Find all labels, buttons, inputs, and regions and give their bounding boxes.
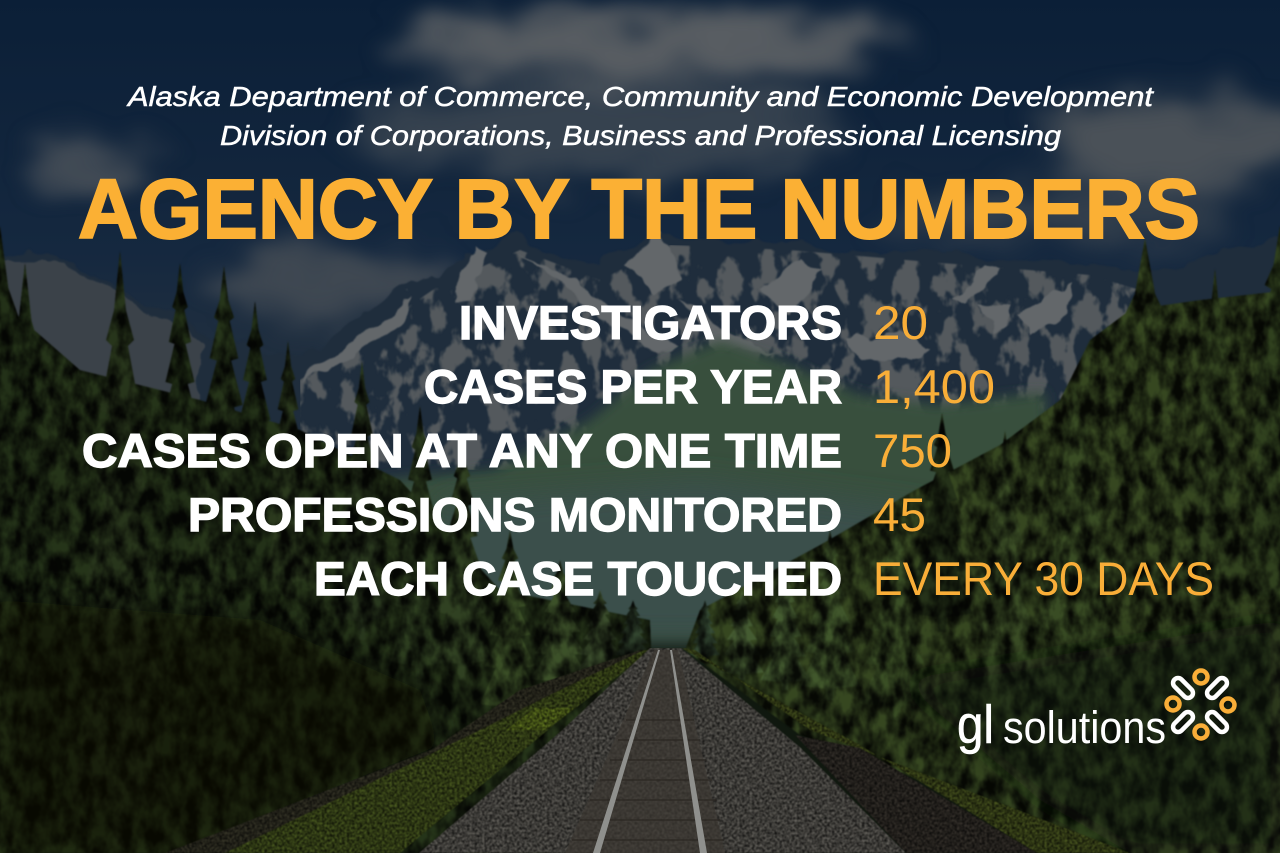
stat values: 750 [873, 424, 952, 477]
background: green valley slope [380, 340, 1060, 640]
background: trackside verges [165, 648, 1130, 853]
stat labels: CASES PER YEAR [424, 360, 842, 413]
stat values: 1,400 [873, 360, 995, 413]
subtitle line 1: Alaska Department of Commerce, Community and Economic Development [126, 81, 1154, 112]
background: snow streaks [300, 235, 1075, 378]
background: rail track [565, 650, 725, 853]
background: blue valley floor [440, 480, 960, 640]
background: mountain snow field [300, 245, 1140, 470]
stat values: EVERY 30 DAYS [873, 552, 1214, 605]
background: gravel rail bed [419, 648, 906, 853]
background: sky [0, 0, 1280, 420]
stat labels: PROFESSIONS MONITORED [188, 488, 842, 541]
background: mountains [0, 232, 1280, 600]
stat labels: EACH CASE TOUCHED [314, 552, 842, 605]
stat labels: CASES OPEN AT ANY ONE TIME [82, 424, 842, 477]
logo wordmark: solutions [1003, 702, 1166, 753]
logo wordmark [957, 695, 1166, 755]
logo ring icon [1166, 670, 1234, 738]
background: left forest [0, 225, 660, 853]
logo: gl solutions [957, 670, 1234, 755]
stat labels [82, 296, 842, 605]
agency subtitle [126, 81, 1154, 151]
stat values: 20 [873, 296, 928, 349]
agency subtitle: Division of Corporations, Business and Professional Licensing [220, 120, 1061, 151]
background: lower right shadow [900, 620, 1280, 853]
logo wordmark: gl [957, 695, 994, 755]
title: AGENCY BY THE NUMBERS [78, 162, 1200, 256]
stat values [873, 296, 1214, 605]
stat labels: INVESTIGATORS [459, 296, 842, 349]
background: right forest [685, 225, 1280, 853]
stat rows [82, 296, 1214, 605]
background: lower left shadow [0, 600, 440, 853]
background: clouds [39, 13, 1280, 319]
stat values: 45 [873, 488, 926, 541]
